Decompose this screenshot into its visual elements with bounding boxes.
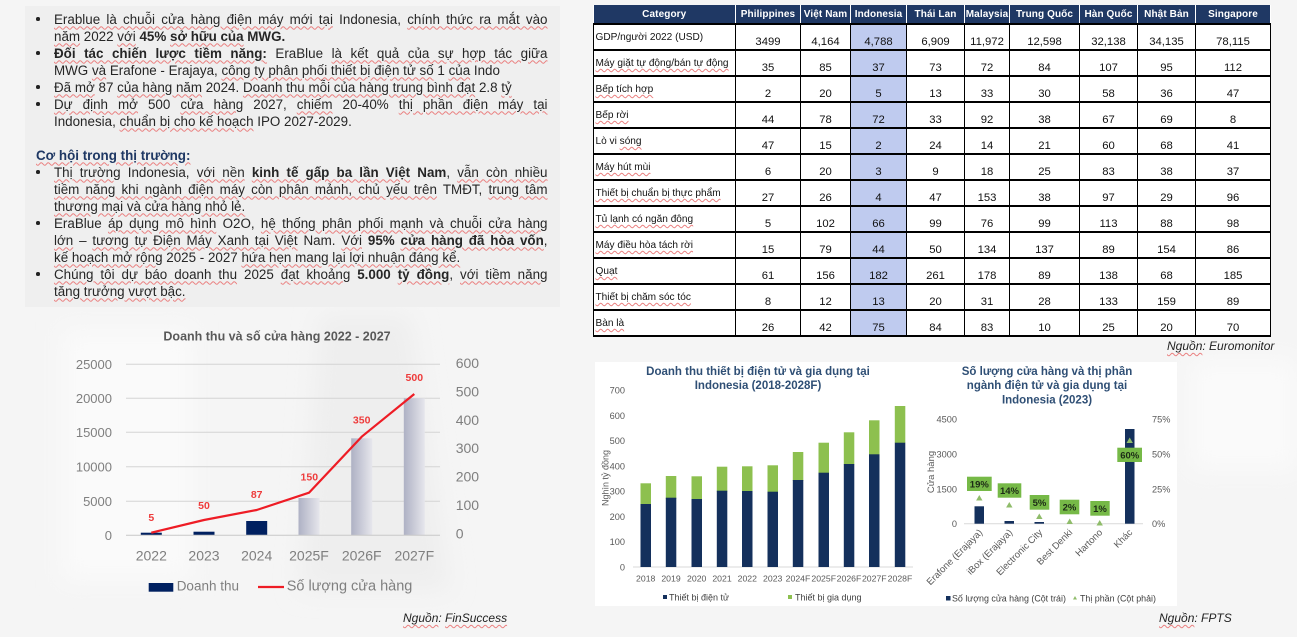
chart: Indonesia electronics and appliance revenue 2018-2028F: 2021 xyxy=(712,574,732,584)
chart: Indonesia electronics and appliance revenue 2018-2028F: Nghìn tỷ đồng xyxy=(600,450,610,506)
table: appliance penetration by country: 178 xyxy=(978,270,996,282)
panel: company text: Dự định mở 500 cửa hàng 2027, chiếm 20-40% thị phần điện máy tại xyxy=(54,96,548,112)
chart: stores and market share Indonesia 2023: 1500 xyxy=(937,484,957,494)
table: appliance penetration by country: 42 xyxy=(819,322,832,334)
table: appliance penetration by country: Bếp rời xyxy=(596,110,628,121)
table: appliance penetration by country: 153 xyxy=(978,192,996,204)
table: appliance penetration by country: 8 xyxy=(1230,114,1236,126)
chart: revenue and store count 2022-2027: 500 xyxy=(456,384,479,400)
table: appliance penetration by country: Máy giặt tự động/bán tự động xyxy=(596,58,729,69)
table: appliance penetration by country: 84 xyxy=(929,322,942,334)
table: appliance penetration by country: 32,138 xyxy=(1091,36,1126,48)
chart: stores and market share Indonesia 2023: 50% xyxy=(1152,450,1170,460)
chart: revenue and store count 2022-2027: 150 xyxy=(301,472,318,484)
chart: stores and market share Indonesia 2023: 0 xyxy=(952,519,957,529)
table: appliance penetration by country: 44 xyxy=(762,114,774,126)
table: appliance penetration by country: 20 xyxy=(819,88,832,100)
chart: stores and market share Indonesia 2023: Số lượng cửa hàng và thị phần xyxy=(962,366,1132,378)
table: appliance penetration by country: Quạt xyxy=(596,266,617,277)
chart: revenue and store count 2022-2027: 25000 xyxy=(76,357,112,372)
chart: stores and market share Indonesia 2023: Cửa hàng xyxy=(926,451,937,493)
chart: Indonesia electronics and appliance revenue 2018-2028F: 2026F xyxy=(837,574,861,584)
chart: Indonesia electronics and appliance revenue 2018-2028F: 2020 xyxy=(687,574,707,584)
table: appliance penetration by country: 60 xyxy=(1102,140,1115,152)
panel: company text: Thị trường Indonesia, với nền kinh tế gấp ba lần Việt Nam, vẫn còn nhiều xyxy=(54,164,547,180)
table: appliance penetration by country: 12 xyxy=(819,296,832,308)
chart: revenue and store count 2022-2027: Doanh thu xyxy=(177,578,239,594)
panel: company text xyxy=(25,6,560,307)
chart: stores and market share Indonesia 2023: Số lượng cửa hàng (Cột trái) xyxy=(952,594,1066,604)
table: appliance penetration by country: 89 xyxy=(1102,244,1115,256)
chart: revenue and store count 2022-2027: 2026F xyxy=(342,548,382,564)
table: appliance penetration by country: 12,598 xyxy=(1027,36,1062,48)
table: appliance penetration by country: 5 xyxy=(765,218,771,230)
chart: stores and market share Indonesia 2023: 19% xyxy=(970,480,989,490)
chart: Indonesia electronics and appliance revenue 2018-2028F: 700 xyxy=(610,386,625,396)
table: appliance penetration by country: 33 xyxy=(929,114,942,126)
panel: company text: EraBlue áp dụng mô hình O2O, hệ thống phân phối mạnh và chuỗi cửa hàng xyxy=(54,216,548,230)
table: appliance penetration by country: Malaysia xyxy=(966,8,1008,20)
chart: revenue and store count 2022-2027: 0 xyxy=(456,525,464,541)
table: appliance penetration by country: 4,164 xyxy=(811,36,840,48)
chart: revenue and store count 2022-2027: 2024 xyxy=(241,548,272,564)
chart: stores and market share Indonesia 2023: 4500 xyxy=(937,414,957,424)
chart: stores and market share Indonesia 2023: 14% xyxy=(1000,486,1020,497)
table: appliance penetration by country: Thiết bị chăm sóc tóc xyxy=(596,292,691,303)
chart: revenue and store count 2022-2027: 5 xyxy=(148,512,154,524)
table: appliance penetration by country: 159 xyxy=(1157,296,1176,308)
chart: revenue and store count 2022-2027: Doanh thu và số cửa hàng 2022 - 2027 xyxy=(163,330,391,344)
table: appliance penetration by country: 99 xyxy=(929,218,942,230)
chart: revenue and store count 2022-2027: 2023 xyxy=(188,548,220,564)
chart: stores and market share Indonesia 2023: 3000 xyxy=(937,450,957,460)
table: appliance penetration by country: 99 xyxy=(1038,218,1051,230)
table: appliance penetration by country: 38 xyxy=(1038,114,1051,126)
table: appliance penetration by country: 38 xyxy=(1160,166,1173,178)
table: appliance penetration by country: 24 xyxy=(929,140,942,152)
source: Euromonitor: Nguồn: Euromonitor xyxy=(1167,339,1274,353)
table: appliance penetration by country: 96 xyxy=(1227,192,1239,204)
table: appliance penetration by country: 35 xyxy=(762,62,774,74)
table: appliance penetration by country: Tủ lạnh có ngăn đông xyxy=(596,214,693,225)
table: appliance penetration by country: 98 xyxy=(1227,218,1239,230)
chart: revenue and store count 2022-2027: 400 xyxy=(456,412,479,428)
table: appliance penetration by country: 107 xyxy=(1099,62,1118,74)
heading: opportunities: Cơ hội trong thị trường: xyxy=(36,148,190,162)
chart: Indonesia electronics and appliance revenue 2018-2028F: Indonesia (2018-2028F) xyxy=(695,380,821,392)
table: appliance penetration by country: 97 xyxy=(1102,192,1115,204)
table: appliance penetration by country: 36 xyxy=(1160,88,1173,100)
table: appliance penetration by country: 89 xyxy=(1038,270,1051,282)
table: appliance penetration by country: 75 xyxy=(872,322,885,334)
table: appliance penetration by country: 47 xyxy=(762,140,774,152)
panel: company text: Đối tác chiến lược tiềm năng: EraBlue là kết quả của sự hợp tác giữa xyxy=(54,46,547,60)
chart: stores and market share Indonesia 2023: Indonesia (2023) xyxy=(1002,394,1092,406)
panel: company text: kế hoạch mở rộng 2025 - 2027 hứa hẹn mang lại lợi nhuận đáng kể. xyxy=(54,250,460,264)
table: appliance penetration by country: 61 xyxy=(762,270,774,282)
table: appliance penetration by country: 261 xyxy=(926,270,945,282)
table: appliance penetration by country: Nhật Bản xyxy=(1144,8,1189,20)
chart: Indonesia electronics and appliance revenue 2018-2028F: 2022 xyxy=(738,574,757,584)
chart: stores and market share Indonesia 2023: Best Denki xyxy=(1035,527,1075,568)
chart: revenue and store count 2022-2027: 350 xyxy=(353,414,371,426)
source: FinSuccess: Nguồn: FinSuccess xyxy=(403,611,507,625)
panel: company text: Erablue là chuỗi cửa hàng điện máy mới tại Indonesia, chính thức ra mắt vào xyxy=(54,12,547,26)
table: appliance penetration by country: 37 xyxy=(1227,166,1239,178)
table: appliance penetration by country: 26 xyxy=(819,192,832,204)
table: appliance penetration by country: 50 xyxy=(929,244,942,256)
table: appliance penetration by country: Indonesia xyxy=(855,8,902,20)
table: appliance penetration by country: 18 xyxy=(981,166,993,178)
chart: revenue and store count 2022-2027: 10000 xyxy=(76,460,112,474)
table: appliance penetration by country: 112 xyxy=(1224,62,1242,74)
table: appliance penetration by country: 20 xyxy=(929,296,942,308)
chart: stores and market share Indonesia 2023: 25% xyxy=(1152,484,1170,494)
table: appliance penetration by country: 78 xyxy=(819,114,832,126)
table: appliance penetration by country: 28 xyxy=(1038,296,1051,308)
table: appliance penetration by country: 102 xyxy=(816,218,835,230)
table: appliance penetration by country: 47 xyxy=(1227,88,1239,100)
table: appliance penetration by country: 13 xyxy=(929,88,942,100)
chart: stores and market share Indonesia 2023: 1% xyxy=(1093,504,1107,515)
table: appliance penetration by country: 4 xyxy=(875,192,882,204)
chart: Indonesia electronics and appliance revenue 2018-2028F: 200 xyxy=(610,512,625,522)
chart: revenue and store count 2022-2027: 300 xyxy=(456,440,479,456)
table: appliance penetration by country: Máy điều hòa tách rời xyxy=(596,240,693,251)
table: appliance penetration by country: 86 xyxy=(1227,244,1239,256)
chart: stores and market share Indonesia 2023: Hartono xyxy=(1073,527,1105,559)
table: appliance penetration by country: 8 xyxy=(765,296,771,308)
table: appliance penetration by country: 69 xyxy=(1160,114,1173,126)
panel: company text: Đã mở 87 của hàng năm 2024. Doanh thu mỗi của hàng trung bình đạt 2.8 tỷ xyxy=(54,80,512,94)
table: appliance penetration by country xyxy=(593,5,1271,337)
table: appliance penetration by country: 25 xyxy=(1038,166,1051,178)
table: appliance penetration by country: 2 xyxy=(765,88,771,100)
table: appliance penetration by country: 83 xyxy=(1102,166,1115,178)
table: appliance penetration by country: 29 xyxy=(1160,192,1173,204)
panel: company text: Chúng tôi dự báo doanh thu 2025 đạt khoảng 5.000 tỷ đồng, với tiềm năng xyxy=(54,266,547,282)
table: appliance penetration by country: Thiết bị chuẩn bị thực phẩm xyxy=(596,188,721,199)
table: appliance penetration by country: 185 xyxy=(1224,270,1242,282)
chart: revenue and store count 2022-2027: 2027F xyxy=(394,548,434,564)
table: appliance penetration by country: 37 xyxy=(872,62,885,74)
panel: company text: tiềm năng khi ngành điện máy còn phân mảnh, chủ yếu trên TMĐT, trung tâm xyxy=(54,182,548,196)
chart: Indonesia electronics and appliance revenue 2018-2028F: 2019 xyxy=(661,574,681,584)
chart: revenue and store count 2022-2027: 5000 xyxy=(83,494,112,509)
table: appliance penetration by country: 47 xyxy=(929,192,942,204)
table: appliance penetration by country: 26 xyxy=(762,322,774,334)
chart: stores and market share Indonesia 2023: iBox (Erajaya) xyxy=(965,527,1015,577)
chart: revenue and store count 2022-2027: 0 xyxy=(105,528,112,543)
chart: revenue and store count 2022-2027: 200 xyxy=(456,469,479,485)
chart: Indonesia electronics and appliance revenue 2018-2028F: 100 xyxy=(610,537,625,547)
table: appliance penetration by country: 44 xyxy=(872,244,885,256)
chart panel: white background for FPTS charts xyxy=(595,362,1177,606)
table: appliance penetration by country: Lò vi sóng xyxy=(596,136,642,147)
chart: Indonesia electronics and appliance revenue 2018-2028F: 300 xyxy=(610,486,625,496)
table: appliance penetration by country: 6 xyxy=(765,166,771,178)
table: appliance penetration by country: 154 xyxy=(1157,244,1176,256)
chart: stores and market share Indonesia 2023: 75% xyxy=(1152,414,1170,424)
chart: revenue and store count 2022-2027: 500 xyxy=(406,372,423,384)
table: appliance penetration by country: 84 xyxy=(1038,62,1051,74)
chart: stores and market share Indonesia 2023: Electronic City xyxy=(994,527,1045,578)
table: appliance penetration by country: 3499 xyxy=(755,36,781,48)
table: appliance penetration by country: 88 xyxy=(1160,218,1173,230)
chart: Indonesia electronics and appliance revenue 2018-2028F: 2018 xyxy=(636,574,656,584)
chart: Indonesia electronics and appliance revenue 2018-2028F: 2025F xyxy=(811,574,836,584)
table: appliance penetration by country: GDP/người 2022 (USD) xyxy=(596,32,703,43)
table: appliance penetration by country: 33 xyxy=(981,88,993,100)
table: appliance penetration by country: 134 xyxy=(978,244,996,256)
chart: Indonesia electronics and appliance revenue 2018-2028F: 2028F xyxy=(888,574,912,584)
table: appliance penetration by country: 34,135 xyxy=(1149,36,1184,48)
panel: company text: thương mại và cửa hàng nhỏ lẻ. xyxy=(54,198,245,214)
chart: Indonesia electronics and appliance revenue 2018-2028F: 400 xyxy=(610,462,625,472)
table: appliance penetration by country: 6,909 xyxy=(921,36,950,48)
table: appliance penetration by country: 73 xyxy=(929,62,942,74)
chart: Indonesia electronics and appliance revenue 2018-2028F: Doanh thu thiết bị điện tử và gia dụng tại xyxy=(646,366,870,378)
chart: Indonesia electronics and appliance revenue 2018-2028F: 0 xyxy=(620,562,625,572)
table: appliance penetration by country: Bếp tích hợp xyxy=(596,84,653,95)
chart: Indonesia electronics and appliance revenue 2018-2028F: 500 xyxy=(610,436,625,446)
table: appliance penetration by country: 138 xyxy=(1099,270,1118,282)
chart: stores and market share Indonesia 2023: 60% xyxy=(1120,450,1140,462)
panel: company text: lớn – tương tự Điện Máy Xanh tại Việt Nam. Với 95% cửa hàng đã hòa vốn, xyxy=(54,232,548,248)
chart: stores and market share Indonesia 2023: 2% xyxy=(1063,502,1077,514)
table: appliance penetration by country: 4,788 xyxy=(864,36,893,48)
table: appliance penetration by country: 15 xyxy=(819,140,832,152)
table: appliance penetration by country: 83 xyxy=(981,322,993,334)
table: appliance penetration by country: Thái Lan xyxy=(915,8,956,20)
chart: revenue and store count 2022-2027: 50 xyxy=(198,500,210,512)
chart: revenue and store count 2022-2027: 87 xyxy=(251,489,263,501)
table: appliance penetration by country: Philippines xyxy=(741,8,795,20)
table: appliance penetration by country: 92 xyxy=(981,114,993,126)
table: appliance penetration by country: Máy hút mùi xyxy=(596,162,650,173)
table: appliance penetration by country: 31 xyxy=(981,296,993,308)
chart: revenue and store count 2022-2027: Số lượng cửa hàng xyxy=(287,578,412,594)
table: appliance penetration by country: 5 xyxy=(875,88,882,100)
chart: Indonesia electronics and appliance revenue 2018-2028F: 2027F xyxy=(862,574,887,584)
table: appliance penetration by country: 21 xyxy=(1038,140,1051,152)
table: appliance penetration by country: Singapore xyxy=(1208,8,1258,20)
table: appliance penetration by country: 133 xyxy=(1099,296,1118,308)
table: appliance penetration by country: 9 xyxy=(932,166,939,178)
table: appliance penetration by country: 68 xyxy=(1160,270,1173,282)
chart: stores and market share Indonesia 2023: 5% xyxy=(1033,498,1047,509)
table: appliance penetration by country: 41 xyxy=(1227,140,1239,152)
table: appliance penetration by country: 156 xyxy=(816,270,835,282)
table: appliance penetration by country: 30 xyxy=(1038,88,1051,100)
chart: revenue and store count 2022-2027: 15000 xyxy=(76,425,112,440)
table: appliance penetration by country: 113 xyxy=(1099,218,1118,230)
table: appliance penetration by country: 13 xyxy=(872,296,885,308)
table: appliance penetration by country: 20 xyxy=(819,166,832,178)
chart: Indonesia electronics and appliance revenue 2018-2028F: 2023 xyxy=(763,574,783,584)
table: appliance penetration by country: 15 xyxy=(762,244,774,256)
table: appliance penetration by country: 72 xyxy=(872,114,885,126)
table: appliance penetration by country: 2 xyxy=(875,140,882,152)
table: appliance penetration by country: 27 xyxy=(762,192,774,204)
table: appliance penetration by country: Bàn là xyxy=(596,318,624,329)
panel: company text: MWG và Erafone - Erajaya, công ty phân phối thiết bị điện tử số 1 của Indo xyxy=(54,62,500,78)
table: appliance penetration by country: Trung Quốc xyxy=(1016,8,1073,20)
chart: revenue and store count 2022-2027: 100 xyxy=(456,497,479,513)
chart: Indonesia electronics and appliance revenue 2018-2028F: 600 xyxy=(610,411,625,421)
chart: revenue and store count 2022-2027: 2025F xyxy=(289,548,329,564)
table: appliance penetration by country: Hàn Quốc xyxy=(1084,8,1133,20)
table: appliance penetration by country: 78,115 xyxy=(1216,36,1250,48)
table: appliance penetration by country: 76 xyxy=(981,218,993,230)
table: appliance penetration by country: 72 xyxy=(981,62,993,74)
table: appliance penetration by country: 79 xyxy=(819,244,832,256)
chart: Indonesia electronics and appliance revenue 2018-2028F: Thiết bị điện tử xyxy=(669,592,729,602)
table: appliance penetration by country: 137 xyxy=(1035,244,1054,256)
table: appliance penetration by country: Việt Nam xyxy=(804,8,847,20)
table: appliance penetration by country: 3 xyxy=(875,166,882,178)
chart: Indonesia electronics and appliance revenue 2018-2028F: Thiết bị gia dụng xyxy=(795,592,862,602)
panel: company text: tăng trưởng vượt bậc. xyxy=(54,284,186,298)
table: appliance penetration by country: Category xyxy=(642,8,686,20)
table: appliance penetration by country: 10 xyxy=(1038,322,1051,334)
chart: stores and market share Indonesia 2023: Thị phần (Cột phải) xyxy=(1080,594,1156,604)
table: appliance penetration by country: 14 xyxy=(981,140,993,152)
table: appliance penetration by country: 66 xyxy=(872,218,885,230)
table: appliance penetration by country: 70 xyxy=(1227,322,1239,334)
chart: stores and market share Indonesia 2023: Erafone (Erajaya) xyxy=(925,527,985,588)
table: appliance penetration by country: 89 xyxy=(1227,296,1239,308)
chart: revenue and store count 2022-2027: 600 xyxy=(456,355,479,371)
table: appliance penetration by country: 58 xyxy=(1102,88,1115,100)
table: appliance penetration by country: 67 xyxy=(1102,114,1115,126)
table: appliance penetration by country: 25 xyxy=(1102,322,1115,334)
source: FPTS: Nguồn: FPTS xyxy=(1159,611,1232,625)
table: appliance penetration by country: 95 xyxy=(1160,62,1173,74)
chart: stores and market share Indonesia 2023: Khác xyxy=(1112,527,1135,550)
chart: Indonesia electronics and appliance revenue 2018-2028F: 2024F xyxy=(786,574,810,584)
chart: revenue and store count 2022-2027: 20000 xyxy=(76,391,112,406)
table: appliance penetration by country: 38 xyxy=(1038,192,1051,204)
chart: stores and market share Indonesia 2023: ngành điện tử và gia dụng tại xyxy=(967,380,1127,392)
panel: company text: năm 2022 với 45% sở hữu của MWG. xyxy=(54,28,285,44)
table: appliance penetration by country: 85 xyxy=(819,62,832,74)
table: appliance penetration by country: 68 xyxy=(1160,140,1173,152)
table: appliance penetration by country: 182 xyxy=(869,270,888,282)
chart: stores and market share Indonesia 2023: 0% xyxy=(1152,519,1165,529)
table: appliance penetration by country: 20 xyxy=(1160,322,1173,334)
chart: revenue and store count 2022-2027: 2022 xyxy=(136,548,167,564)
table: appliance penetration by country: 11,972 xyxy=(970,36,1004,48)
panel: company text: Indonesia, chuẩn bị cho kế hoạch IPO 2027-2029. xyxy=(54,114,352,128)
